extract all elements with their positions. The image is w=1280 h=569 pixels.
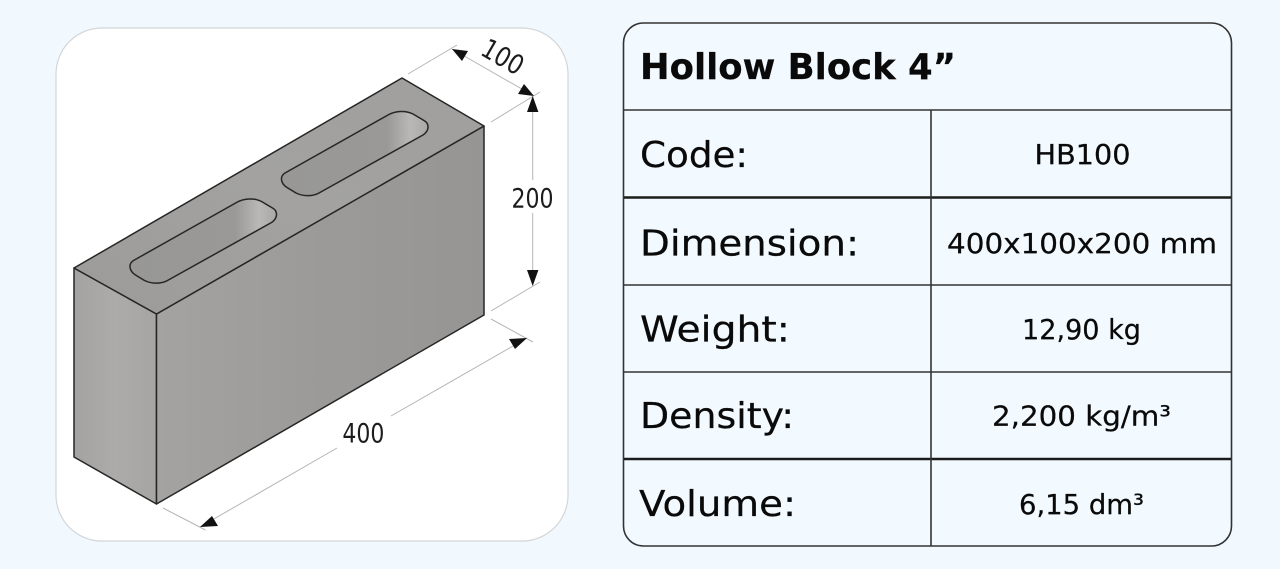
row: volume: Volume: xyxy=(639,484,796,525)
row: dimension: Dimension: xyxy=(640,224,859,265)
row: weight: Weight: xyxy=(640,310,790,351)
row: dimension xyxy=(640,224,1217,265)
hole: left slot xyxy=(130,199,277,283)
table frame xyxy=(624,23,1232,546)
dimension: width 100 xyxy=(408,33,540,122)
dimension: length 400: 400 xyxy=(342,418,384,449)
dimension: length 400 xyxy=(163,319,533,530)
block front face xyxy=(156,126,484,504)
row: code: Code: xyxy=(640,135,748,176)
dimension: height 200 xyxy=(491,96,554,311)
row: volume xyxy=(639,484,1144,525)
row: dimension: 400x100x200 mm xyxy=(947,227,1217,260)
dimension: height 200: 200 xyxy=(512,183,554,214)
table grid lines xyxy=(624,110,1231,546)
row: density xyxy=(640,396,1171,437)
hollow block illustration xyxy=(74,78,484,504)
row: weight: 12,90 kg xyxy=(1022,313,1141,346)
panel: specification table xyxy=(624,23,1232,546)
row: code xyxy=(640,135,1130,176)
row: volume: 6,15 dm³ xyxy=(1019,488,1144,521)
block top face xyxy=(74,78,484,314)
block left face xyxy=(74,268,156,504)
panel: block drawing xyxy=(56,28,568,541)
row: density: 2,200 kg/m³ xyxy=(992,400,1171,433)
table title: Hollow Block 4” xyxy=(640,47,956,88)
row: code: HB100 xyxy=(1034,138,1130,171)
row: density: Density: xyxy=(640,396,794,437)
hole: right slot xyxy=(281,111,428,196)
panel background xyxy=(56,28,568,541)
row: weight xyxy=(640,310,1141,351)
dimension: width 100: 100 xyxy=(475,33,529,82)
